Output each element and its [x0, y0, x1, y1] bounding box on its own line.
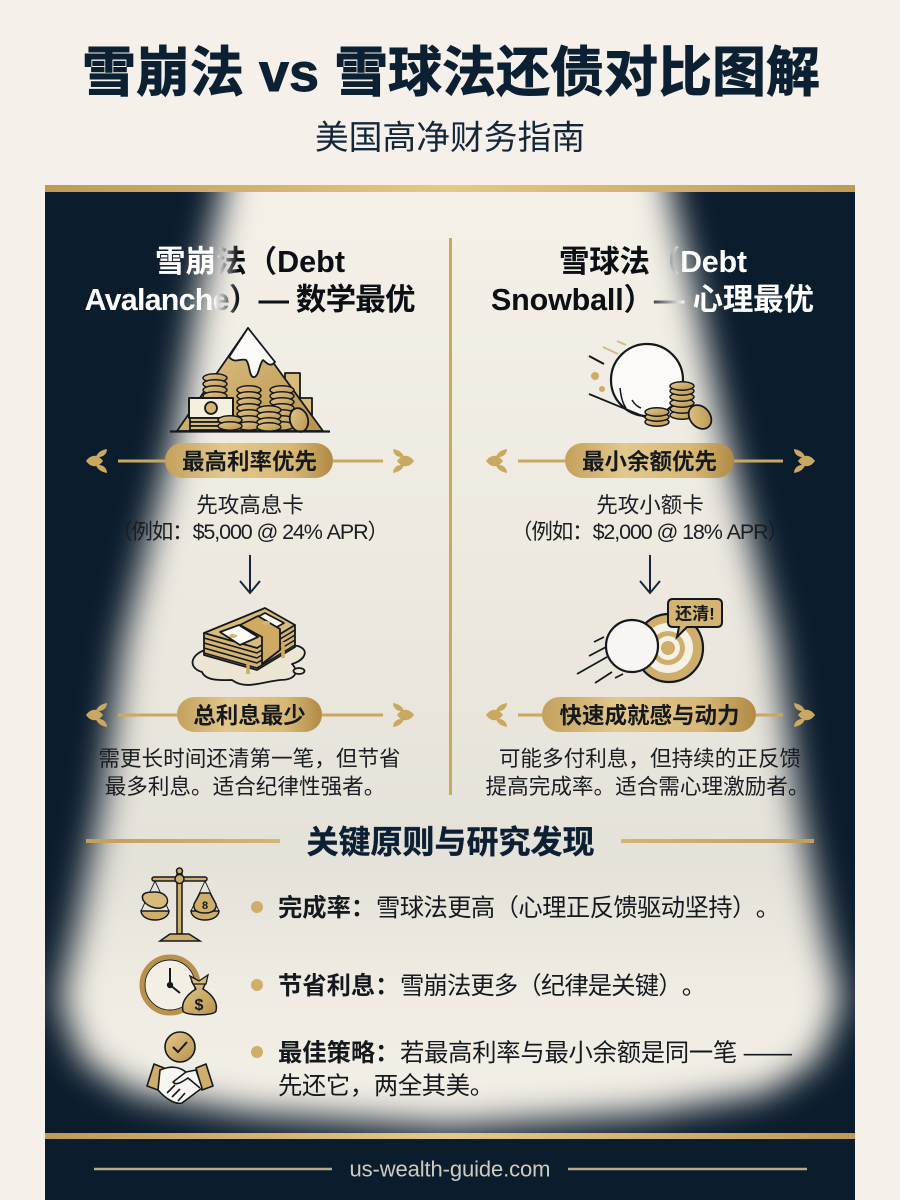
text: avalanche summary: 需更长时间还清第一笔，但节省: [98, 746, 401, 771]
text: attack high interest card: [111, 494, 389, 544]
text: attack high interest card: 先攻高息卡: [196, 494, 304, 518]
text: best strategy: 若最高利率与最小余额是同一笔 ——: [400, 1040, 793, 1067]
title: 雪崩法 vs 雪球法还债对比图解: [82, 43, 820, 103]
text: snowball summary: 可能多付利息，但持续的正反馈: [499, 746, 801, 771]
heading: snowball: Snowball）— 心理最优: [491, 283, 814, 317]
text: avalanche summary: [98, 746, 401, 799]
text: best strategy: [278, 1040, 793, 1100]
center divider: [449, 238, 452, 795]
icon: clock and money bag: [142, 957, 216, 1015]
icon: snowball hitting target: [577, 599, 722, 683]
text: completion rate: 完成率：: [278, 895, 375, 922]
text: attack small balance card: [511, 494, 789, 544]
text: snowball summary: [486, 746, 809, 799]
row: best strategy: [147, 1032, 793, 1103]
label: least total interest: 总利息最少: [193, 702, 306, 728]
label: highest rate first: 最高利率优先: [182, 450, 317, 474]
label: least total interest: [86, 697, 414, 732]
row: interest saved: [142, 957, 706, 1015]
label: smallest balance first: [486, 443, 815, 478]
icon: clock and money bag: $: [195, 997, 204, 1014]
icon: mountain with coins: [170, 328, 330, 434]
panel: avalanche column: [84, 245, 416, 799]
text: avalanche summary: 最多利息。适合纪律性强者。: [105, 774, 385, 799]
icon: handshake with check: [147, 1032, 213, 1103]
text: interest saved: 雪崩法更多（纪律是关键）。: [400, 973, 706, 1000]
icon: snowball hitting target: 还清!: [675, 604, 715, 624]
section heading: key principles: 关键原则与研究发现: [306, 824, 595, 860]
row: completion rate: [141, 868, 780, 941]
panel: snowball column: [486, 245, 815, 799]
top gold bar: [45, 185, 855, 192]
heading: avalanche: [84, 245, 416, 317]
heading: avalanche: Avalanche）— 数学最优: [84, 283, 416, 317]
heading: avalanche: 雪崩法（Debt: [155, 245, 345, 279]
icon: balance scale: 8: [202, 900, 208, 912]
text: attack small balance card: （例如：$2,000 @ 18% APR）: [511, 520, 789, 544]
bullet: [251, 901, 263, 913]
heading: snowball: [491, 245, 814, 317]
icon: balance scale: [141, 868, 219, 941]
label: highest rate first: [86, 443, 414, 478]
panel: findings list: [141, 868, 793, 1103]
icon: snowball with coins: [589, 341, 716, 433]
bullet: [251, 979, 263, 991]
section heading: key principles: [86, 824, 814, 860]
text: best strategy: 最佳策略：: [278, 1040, 399, 1067]
icon: melting money stack: [193, 608, 305, 685]
text: attack small balance card: 先攻小额卡: [596, 494, 704, 518]
arrow: [640, 555, 660, 593]
text: best strategy: 先还它，两全其美。: [278, 1073, 494, 1100]
footer: us-wealth-guide.com: [350, 1156, 550, 1182]
text: completion rate: 雪球法更高（心理正反馈驱动坚持）。: [376, 895, 780, 922]
subtitle: 美国高净财务指南: [315, 119, 585, 157]
text: interest saved: 节省利息：: [278, 973, 399, 1000]
bullet: [251, 1046, 263, 1058]
text: snowball summary: 提高完成率。适合需心理激励者。: [486, 774, 809, 799]
label: quick wins and motivation: [486, 697, 815, 732]
label: smallest balance first: 最小余额优先: [582, 450, 717, 474]
text: attack high interest card: （例如：$5,000 @ 24% APR）: [111, 520, 389, 544]
bottom gold bar: [45, 1133, 855, 1139]
label: quick wins and motivation: 快速成就感与动力: [559, 702, 740, 728]
arrow: [240, 555, 260, 593]
heading: snowball: 雪球法（Debt: [559, 245, 747, 279]
